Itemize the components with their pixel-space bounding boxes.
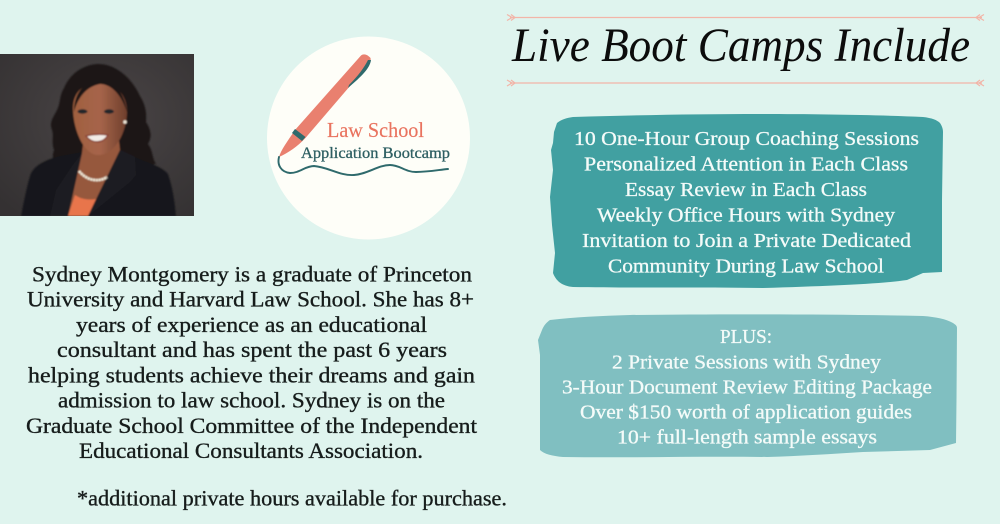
feature list: Weekly Office Hours with Sydney xyxy=(597,204,896,226)
lapel xyxy=(130,155,131,156)
portrait photo of Sydney Montgomery xyxy=(0,54,194,216)
extras list: 10+ full-length sample essays xyxy=(617,426,877,448)
logo subtext: Application Bootcamp xyxy=(301,145,450,162)
extras list: Over $150 worth of application guides xyxy=(580,402,912,424)
extras list: 3-Hour Document Review Editing Package xyxy=(562,376,932,398)
panel: live boot camp features xyxy=(550,114,943,288)
biography text: years of experience as an educational xyxy=(76,312,427,337)
top ornamental rule xyxy=(507,14,984,20)
extras list: PLUS: xyxy=(720,326,772,348)
biography text: Graduate School Committee of the Independent xyxy=(26,413,477,438)
biography text: helping students achieve their dreams and gain xyxy=(28,362,475,388)
biography text: admission to law school. Sydney is on the xyxy=(58,388,445,412)
logo circle xyxy=(267,36,470,240)
extras list xyxy=(562,326,932,448)
feature list xyxy=(574,128,919,278)
biography text: consultant and has spent the past 6 years xyxy=(57,337,447,362)
feature list: Essay Review in Each Class xyxy=(625,179,867,201)
biography text: Educational Consultants Association. xyxy=(79,438,423,463)
heading banner xyxy=(507,14,984,86)
feature list: Invitation to Join a Private Dedicated xyxy=(582,230,911,252)
feature list: 10 One-Hour Group Coaching Sessions xyxy=(574,128,919,150)
footnote: *additional private hours available for purchase. xyxy=(77,486,507,510)
feature list: Personalized Attention in Each Class xyxy=(584,154,908,176)
blazer xyxy=(20,158,176,216)
icon: pen xyxy=(278,54,448,175)
bottom ornamental rule xyxy=(507,80,984,86)
title: Live Boot Camps Include xyxy=(511,19,970,72)
extras list: 2 Private Sessions with Sydney xyxy=(612,352,882,374)
logo text: Law School xyxy=(327,118,424,142)
hair back xyxy=(51,64,156,172)
panel: plus extras xyxy=(538,314,957,457)
blouse xyxy=(68,195,96,216)
hair front xyxy=(74,80,127,112)
biography text: University and Harvard Law School. She has 8+ xyxy=(27,286,474,312)
neck and chest xyxy=(68,132,120,216)
face xyxy=(73,83,127,155)
biography text: Sydney Montgomery is a graduate of Princeton xyxy=(32,262,472,286)
feature list: Community During Law School xyxy=(608,256,884,278)
biography text xyxy=(26,262,477,463)
